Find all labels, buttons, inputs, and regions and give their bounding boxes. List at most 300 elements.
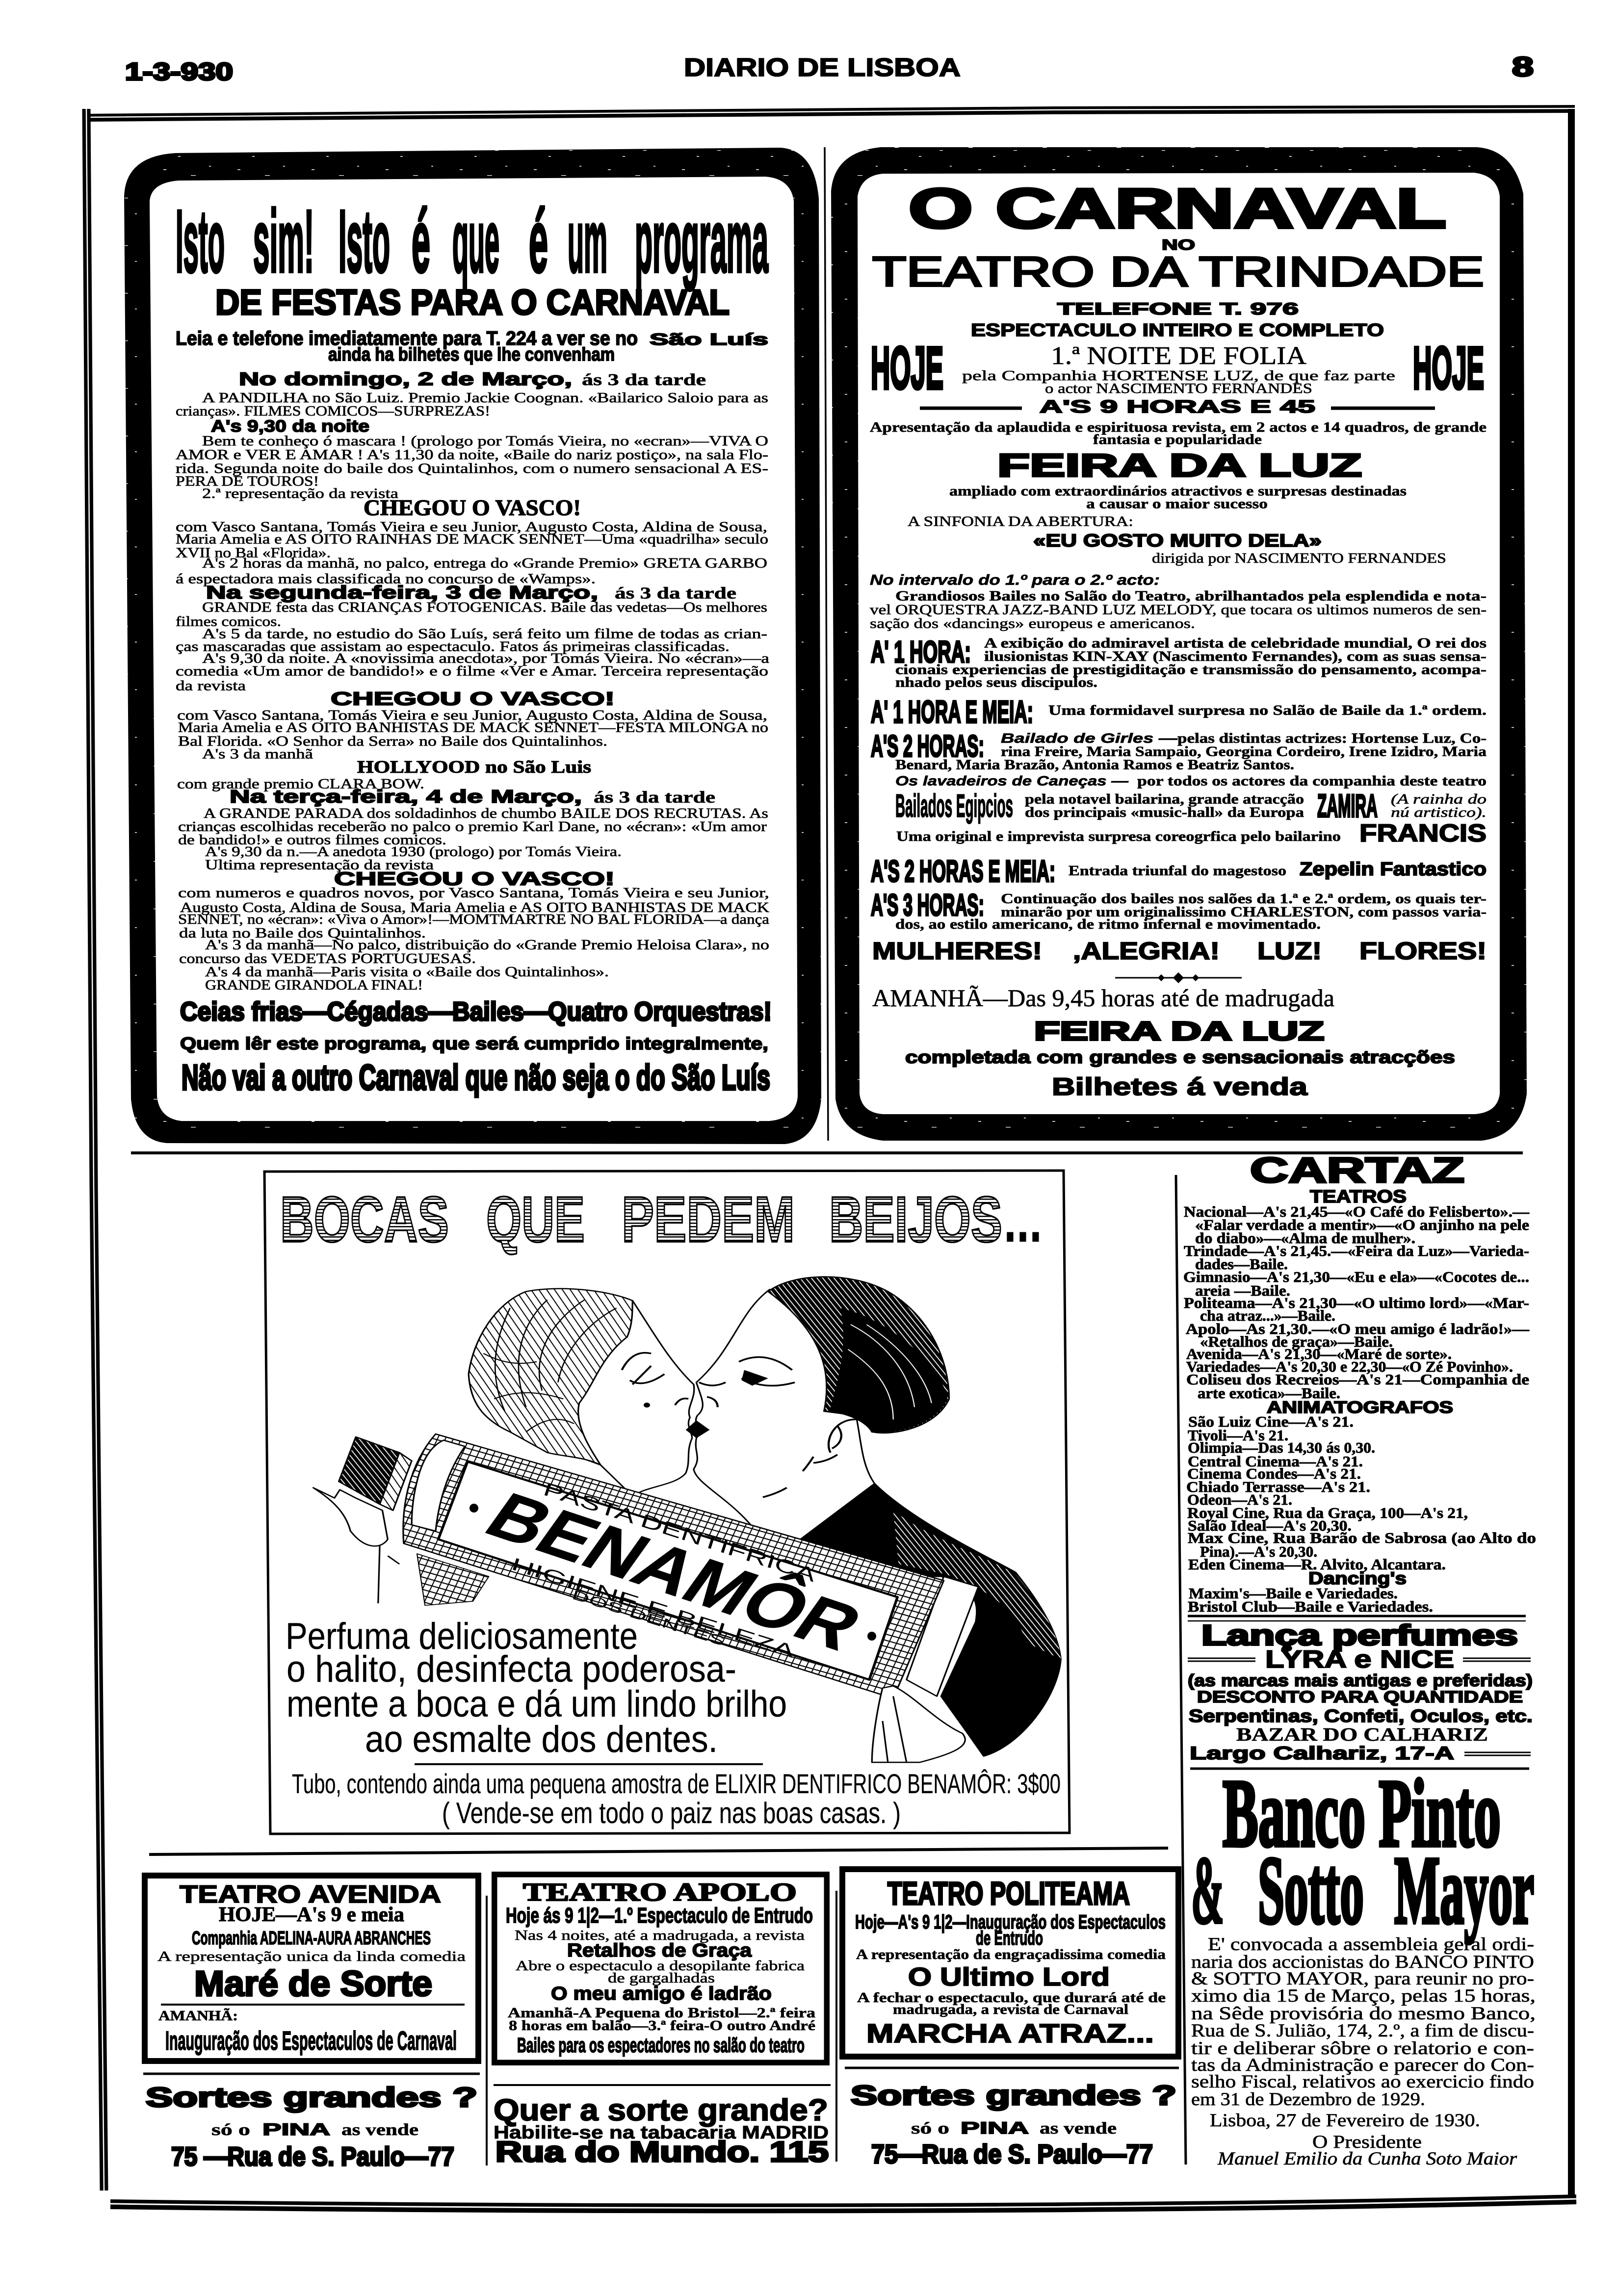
schedule: three o'clock (871, 888, 1487, 932)
lottery ad: Rua do Mundo: Quer a sorte grande? (494, 2093, 828, 2127)
box text: A representação da engraçadissima comedia (856, 1947, 1166, 1962)
ad copy and address: (as marcas mais antigas e preferidas) (1188, 1671, 1533, 1690)
box text: Amanhã-A Pequena do Bristol—2.ª feira (508, 2005, 816, 2021)
tube label text: HIGIENE E BELEZA (509, 1554, 797, 1662)
box text: TEATRO AVENIDA (180, 1880, 441, 1908)
Monday programme: CHEGOU O VASCO! (331, 689, 615, 709)
woman's face details (622, 1353, 688, 1405)
cinema listings: Tivoli—A's 21. (1188, 1427, 1288, 1444)
schedule: one o'clock (871, 635, 1487, 690)
schedule: half past one: A' 1 HORA E MEIA: (871, 694, 1033, 730)
headline: Isto (339, 192, 390, 291)
Sunday programme: crianças». FILMES COMICOS—SURPREZAS! (176, 403, 490, 419)
Monday programme: ças mascaradas que assistam ao espectaculo. Fatos ás primeiras classificadas. (176, 639, 730, 654)
box text: Hoje—A's 9 1|2—Inauguração dos Espectaculos (855, 1911, 1166, 1933)
ad price and availability: ( Vende-se em todo o paiz nas boas casas. ) (442, 1797, 901, 1829)
ad headline: ... (1004, 1183, 1042, 1255)
schedule: two o'clock: pelas distintas actrizes: Hortense Luz, Co- (1177, 731, 1487, 746)
lottery ad: Rua do Mundo: Rua do Mundo. 115 (496, 2136, 829, 2168)
ad copy and address: Largo Calhariz, 17-A (1190, 1743, 1454, 1763)
man's suit (792, 1484, 1061, 1756)
headline: ESPECTACULO INTEIRO E COMPLETO (971, 320, 1384, 340)
attractions banner: LUZ! (1257, 938, 1322, 965)
notice text: E' convocada a assembleia geral ordi- (1208, 1934, 1534, 1955)
Tuesday programme (178, 786, 769, 993)
schedule: three o'clock: minarão por um originalissimo CHARLESTON, com passos varia- (1001, 904, 1487, 920)
panel frame (831, 147, 1527, 1141)
Monday programme: comedia «Um amor de bandido!» e o filme «Ver e Amar. Terceira representação (176, 663, 768, 679)
Sunday programme: Bem te conheço ó mascara ! (prologo por Tomás Vieira, no «ecran»—VIVA O (202, 433, 768, 449)
Sunday programme: CHEGOU O VASCO! (364, 496, 581, 520)
telephone call to action: Leia e telefone imediatamente para T. 224 a ver se no (176, 328, 638, 349)
cinema listings: Pina).—A's 20,30. (1200, 1543, 1317, 1560)
headline: sim! (253, 192, 314, 291)
Feira da Luz description: «EU GOSTO MUITO DELA» (1033, 530, 1322, 550)
headline: Isto (176, 192, 225, 291)
bank name: Sotto (1258, 1836, 1364, 1944)
date: 1-3-930 (125, 58, 233, 85)
Tuesday programme: A's 4 da manhã—Paris visita o «Baile dos Quintalinhos». (205, 964, 609, 980)
Monday programme: ás 3 da tarde (615, 584, 736, 602)
cinema listings: Max Cine, Rua Barão de Sabrosa (ao Alto do (1188, 1529, 1536, 1546)
notice text: na Sêde provisória do mesmo Banco, (1191, 2004, 1536, 2024)
panel: Benamor toothpaste advertisement (264, 1171, 1069, 1834)
theatre listings: Trindade—A's 21,45.—«Feira da Luz»—Varieda- (1184, 1242, 1529, 1259)
headline: NO (1162, 237, 1195, 253)
headline (176, 192, 768, 291)
Tuesday programme: ás 3 da tarde (594, 788, 715, 807)
ad headline (280, 1183, 1042, 1255)
box text: O meu amigo é ladrão (551, 1983, 772, 2004)
Sunday programme: 2.ª representação da revista (202, 486, 398, 501)
cinema listings: Central Cinema—A's 21. (1188, 1453, 1363, 1470)
notice text: selho Fiscal, relativos ao exercicio findo (1191, 2072, 1534, 2092)
Feira da Luz description (870, 419, 1487, 566)
panel: Teatro Avenida (145, 1876, 478, 2061)
schedule: three o'clock: A'S 3 HORAS: (871, 888, 984, 922)
cinema listings: Eden Cinema—R. Alvito, Alcantara. (1188, 1556, 1446, 1573)
tomorrow notice: Bilhetes á venda (1052, 1073, 1308, 1100)
schedule: one o'clock: cionais experiencias de prestigiditação e transmissão do pensamento, acompa- (895, 662, 1487, 678)
theatre listings: cha atraz...»—Baile. (1200, 1307, 1335, 1324)
today banner: HOJE (871, 335, 943, 401)
interval dances (870, 572, 1487, 631)
tomorrow notice: completada com grandes e sensacionais atracções (905, 1047, 1455, 1067)
ad headline: BOCAS (280, 1183, 449, 1255)
ad copy and address: BAZAR DO CALHARIZ (1236, 1724, 1488, 1745)
toothpaste tube (403, 1434, 944, 1698)
Monday programme: da revista (176, 678, 246, 694)
schedule: two o'clock: nú artistico). (1391, 805, 1487, 820)
interval dances: No intervalo do 1.º para o 2.º acto: (870, 572, 1160, 588)
box text: Bailes para os espectadores no salão do teatro (517, 2034, 805, 2057)
notice text: naria dos accionistas do BANCO PINTO (1191, 1952, 1534, 1972)
theatre listings: dades—Baile. (1195, 1255, 1288, 1273)
schedule: half past one: Uma formidavel surpresa no Salão de Baile da 1.ª ordem. (1048, 703, 1487, 718)
attractions banner: ,ALEGRIA! (1073, 938, 1220, 965)
cinemas heading: ANIMATOGRAFOS (1267, 1398, 1453, 1417)
cinema listings (1186, 1413, 1536, 1573)
headline: que (452, 192, 499, 291)
ad price and availability: Tubo, contendo ainda uma pequena amostra de ELIXIR DENTIFRICO BENAMÔR: 3$00 (292, 1768, 1061, 1799)
Sunday programme (176, 369, 768, 587)
theatre listings: Coliseu dos Recreios—A's 21—Companhia de (1186, 1371, 1529, 1388)
box text: Companhia ADELINA-AURA ABRANCHES (192, 1928, 431, 1949)
Monday programme: HOLLYOOD no São Luis (357, 757, 591, 777)
Tuesday programme: A's 3 da manhã—No palco, distribuição do «Grande Premio Heloisa Clara», no (205, 937, 769, 953)
box text (506, 1879, 816, 2057)
theatre listings: do diabo»—«Alma de mulher». (1195, 1229, 1415, 1247)
Tuesday programme: Augusto Costa, Aldina de Sousa, Maria Amelia e AS OITO BANHISTAS DE MACK (180, 900, 769, 915)
schedule: one o'clock: nhado pelos seus discipulos. (895, 675, 1097, 690)
box text: Abre o espectaculo a desopilante fabrica (516, 1958, 805, 1974)
Tuesday programme: crianças escolhidas receberão no palco o premio Karl Dane, no «écran»: «Um amor (178, 819, 767, 835)
lottery ad: Pina right (845, 2068, 1179, 2169)
panel: Sao Luis carnival programme (124, 148, 821, 1144)
headline: é (529, 192, 548, 291)
Sunday programme: AMOR e VER E AMAR ! A's 11,30 da noite, «Baile do nariz postiço», na sala Flo- (176, 447, 768, 463)
schedule: half past two: Entrada triunfal do magestoso (1069, 863, 1286, 879)
theatre listings: areia —Baile. (1195, 1282, 1290, 1299)
closing slogans (180, 997, 772, 1097)
Sunday programme: A's 2 horas da manhã, no palco, entrega do «Grande Premio» GRETA GARBO (202, 555, 767, 571)
today banner (871, 335, 1484, 417)
Sunday programme: XVII no Bal «Florida». (176, 545, 331, 561)
box text: Maré de Sorte (194, 1964, 432, 2004)
cinema listings: Salão Ideal—A's 20,30. (1188, 1517, 1352, 1534)
theatre listings: Politeama—A's 21,30—«O ultimo lord»—«Mar- (1184, 1294, 1529, 1311)
telephone call to action: São Luís (650, 330, 768, 348)
Tuesday programme: concurso das VEDETAS PORTUGUESAS. (179, 951, 476, 966)
schedule: two o'clock: FRANCIS (1359, 819, 1487, 847)
panel: Banco Pinto & Sotto Mayor notice (1191, 1759, 1536, 2169)
box text (157, 1880, 466, 2056)
schedule: three o'clock: Continuação dos bailes nos salões da 1.ª e 2.ª ordem, os quais ter- (1001, 891, 1487, 907)
panel: Teatro da Trindade carnival (831, 147, 1527, 1141)
masthead (125, 51, 1534, 85)
Monday programme: com Vasco Santana, Tomás Vieira e seu Junior, Augusto Costa, Aldina de Sousa, (177, 707, 767, 723)
box frame (145, 1876, 478, 2061)
theatre listings: Gimnasio—A's 21,30—«Eu e ela»—«Cocotes de... (1183, 1268, 1529, 1285)
dancing heading: Dancing's (1308, 1569, 1407, 1588)
lottery ad: Rua do Mundo: Habilite-se na tabacaria MADRID (494, 2122, 829, 2142)
man's ear and face details (699, 1357, 859, 1497)
box frame (495, 1875, 827, 2062)
cinema listings: Odeon—A's 21. (1187, 1491, 1292, 1508)
schedule: two o'clock: Bailado de Girles — (1001, 731, 1178, 746)
schedule: half past two: A'S 2 HORAS E MEIA: (871, 855, 1055, 888)
panel: Teatro da Trindade carnival: HOJE (1413, 335, 1484, 401)
headline (872, 178, 1484, 340)
interval dances: sação dos «dancings» europeus e americanos. (870, 616, 1195, 631)
attractions banner (872, 938, 1487, 965)
panel: Lanca perfumes advertisement: LYRA e NICE (1265, 1645, 1454, 1673)
box text: HOJE—A's 9 e meia (219, 1904, 404, 1926)
box text: O Ultimo Lord (908, 1963, 1110, 1991)
schedule: two o'clock: dos principais «music-hall» da Europa (1025, 805, 1304, 820)
lottery ad: Pina right: PINA (961, 2119, 1029, 2138)
tube label text: DOS DENTES (570, 1587, 727, 1649)
closing slogans: Quem lêr este programa, que será cumprido integralmente, (180, 1034, 768, 1053)
schedule: half past two: Zepelin Fantastico (1300, 859, 1487, 880)
Tuesday programme: com numeros e quadros novos, por Vasco Santana, Tomás Vieira e seu Junior, (178, 885, 769, 901)
Sunday programme: PERA DE TOUROS! (176, 473, 319, 489)
notice text: Rua de S. Julião, 174, 2.º, a fim de discu- (1191, 2021, 1534, 2041)
box text: Hoje ás 9 1|2—1.º Espectaculo de Entrudo (506, 1904, 813, 1928)
ad headline: QUE (486, 1183, 585, 1255)
ad copy: o halito, desinfecta poderosa- (287, 1648, 736, 1690)
listings title: CARTAZ (1250, 1151, 1464, 1190)
Tuesday programme: A GRANDE PARADA dos soldadinhos de chumbo BAILE DOS RECRUTAS. As (204, 806, 768, 821)
Monday programme: Bal Florida. «O Senhor da Serra» no Baile dos Quintalinhos. (178, 733, 607, 749)
schedule: one o'clock: A exibição do admiravel artista de celebridade mundial, O rei dos (984, 635, 1487, 651)
schedule: two o'clock: A'S 2 HORAS: (871, 730, 984, 763)
schedule: two o'clock: pela notavel bailarina, grande atracção (1025, 791, 1304, 807)
product name: Lança perfumes (1201, 1619, 1518, 1651)
schedule: two o'clock: (A rainha do (1391, 791, 1487, 807)
dancing listings: Bristol Club—Baile e Variedades. (1188, 1598, 1433, 1615)
panel: Cartaz theatre listings (1183, 1151, 1536, 1615)
woman's hair (469, 1289, 632, 1465)
panel: Lanca perfumes advertisement (1188, 1616, 1533, 1769)
box text: TEATRO POLITEAMA (887, 1875, 1130, 1911)
schedule: one o'clock: A' 1 HORA: (871, 635, 971, 669)
headline: TELEFONE T. 976 (1057, 300, 1299, 318)
schedule: two o'clock: Uma original e imprevista surpresa coreogrfica pelo bailarino (896, 829, 1341, 844)
Monday programme (176, 582, 769, 792)
Tuesday programme: A's 9,30 da n.—A anedota 1930 (prologo) por Tomás Vieira. (205, 844, 622, 860)
schedule: two o'clock: por todos os actores da companhia deste teatro (1137, 773, 1487, 789)
Feira da Luz description: A SINFONIA DA ABERTURA: (908, 514, 1133, 529)
panel: Teatro Apolo (495, 1875, 827, 2062)
schedule: two o'clock: ZAMIRA (1317, 787, 1378, 824)
box frame (842, 1869, 1178, 2057)
panel frame (124, 148, 821, 1144)
theatres heading: TEATROS (1310, 1186, 1407, 1206)
cinema listings: Royal Cine, Rua da Graça, 100—A's 21, (1187, 1504, 1468, 1521)
ad copy: ao esmalte dos dentes. (365, 1719, 718, 1760)
Tuesday programme: Ultima representação da revista (205, 857, 434, 873)
notice text: tir e deliberar sôbre o relatorio e con- (1191, 2038, 1534, 2059)
Monday programme: A's 3 da manhã (202, 746, 313, 762)
Sunday programme: Maria Amelia e AS OITO RAINHAS DE MACK SENNET—Uma «quadrilha» seculo (176, 531, 768, 547)
lottery ad: Pina right: Sortes grandes ? (851, 2080, 1176, 2111)
date and signature: O Presidente (1312, 2132, 1422, 2152)
theatre listings: Avenida—A's 21,30—«Maré de sorte». (1186, 1345, 1452, 1362)
schedule: one o'clock: ilusionistas KIN-XAY (Nascimento Fernandes), com as suas sensa- (984, 649, 1487, 664)
ad copy (286, 1616, 787, 1764)
attractions banner: FLORES! (1359, 938, 1487, 965)
tube label text: BENAMÔR (472, 1479, 876, 1663)
illustration: kissing couple with toothpaste tube (313, 1277, 1061, 1762)
theatre listings: Variedades—A's 20,30 e 22,30—«O Zé Povinho». (1186, 1358, 1513, 1375)
Feira da Luz description: fantasia e popularidade (1093, 432, 1262, 447)
notice text: ximo dia 15 de Março, pelas 15 horas, (1191, 1986, 1536, 2006)
lottery ad: Rua do Mundo (494, 2085, 831, 2168)
lottery ad: Pina left: Sortes grandes ? (146, 2082, 477, 2113)
today banner: 1.ª NOITE DE FOLIA (1051, 342, 1306, 370)
shirt cuff (907, 1576, 978, 1696)
headline: TEATRO DA TRINDADE (872, 249, 1484, 295)
ad copy: mente a boca e dá um lindo brilho (287, 1683, 787, 1725)
man's eye (742, 1370, 768, 1385)
box text: Nas 4 noites, até a madrugada, a revista (515, 1928, 805, 1943)
headline: O CARNAVAL (909, 178, 1446, 240)
lottery ad: Pina left: PINA (262, 2120, 330, 2139)
cinema listings: Chiado Terrasse—A's 21. (1186, 1478, 1370, 1495)
box text: TEATRO APOLO (523, 1879, 797, 1906)
Feira da Luz description: FEIRA DA LUZ (997, 447, 1362, 483)
notice text: em 31 de Dezembro de 1929. (1191, 2089, 1425, 2110)
ad headline: BEIJOS (829, 1183, 1002, 1255)
schedule: half past one (871, 694, 1487, 730)
Tuesday programme: SENNET, no «écran»: «Viva o Amor»!—MOMTMARTRE NO BAL FLORIDA—a dança (178, 912, 769, 927)
theatre listings: «Falar verdade a mentir»—«O anjinho na pele (1195, 1216, 1529, 1233)
headline: é (412, 192, 430, 291)
notice text: tas da Administração e parecer do Con- (1191, 2055, 1534, 2075)
interval dances: Grandiosos Bailes no Salão do Teatro, abrilhantados pela esplendida e nota- (895, 588, 1487, 604)
box text (855, 1875, 1166, 2048)
schedule: two o'clock: Os lavadeiros de Caneças — (895, 773, 1129, 788)
box text: de Entrudo (976, 1928, 1043, 1949)
theatre listings: «Retalhos de graça»—Baile. (1200, 1333, 1393, 1350)
ad copy and address (1188, 1671, 1533, 1769)
panel: Teatro Politeama (842, 1869, 1178, 2057)
lottery ad: Pina right: 75—Rua de S. Paulo—77 (871, 2139, 1153, 2169)
box text: A fechar o espectaculo, que durará até de (857, 1990, 1166, 2006)
subheadline: DE FESTAS PARA O CARNAVAL (215, 283, 730, 322)
cinema listings: São Luiz Cine—A's 21. (1188, 1413, 1354, 1430)
attractions banner: MULHERES! (872, 938, 1042, 965)
closing slogans: Não vai a outro Carnaval que não seja o do São Luís (182, 1058, 770, 1097)
box text: Retalhos de Graça (567, 1940, 752, 1961)
ad copy and address: DESCONTO PARA QUANTIDADE (1197, 1688, 1523, 1706)
box text: Inauguração dos Espectaculos de Carnaval (165, 2026, 457, 2056)
date and signature: Manuel Emilio da Cunha Soto Maior (1217, 2149, 1517, 2169)
lottery ad: Pina left: só o (211, 2121, 250, 2139)
schedule: three o'clock: dos, ao estilo americano, de ritmo infernal e movimentado. (895, 916, 1321, 932)
tube cap (339, 1437, 399, 1504)
Feira da Luz description: a causar o maior sucesso (1086, 496, 1268, 512)
box text: de gargalhadas (608, 1970, 715, 1986)
today banner: A'S 9 HORAS E 45 (1040, 396, 1315, 417)
tomorrow notice: FEIRA DA LUZ (1034, 1017, 1324, 1046)
bank name: & (1191, 1836, 1224, 1944)
newspaper name: DIARIO DE LISBOA (684, 53, 961, 82)
tomorrow notice: AMANHÃ—Das 9,45 horas até de madrugada (872, 984, 1334, 1012)
date and signature (1210, 2111, 1517, 2169)
closing slogans: Ceias frias—Cégadas—Bailes—Quatro Orquestras! (180, 997, 772, 1026)
today banner: pela Companhia HORTENSE LUZ, de que faz parte (962, 368, 1395, 384)
holding left hand and lace cuff (313, 1487, 388, 1546)
Feira da Luz description: ampliado com extraordinários atractivos e surpresas destinadas (949, 483, 1407, 499)
woman's head (548, 1301, 694, 1496)
jacket shoulder hatching (893, 1511, 1061, 1659)
Tuesday programme: Na terça-feira, 4 de Março, (230, 786, 582, 807)
Sunday programme: rida. Segunda noite do baile dos Quintalinhos, com o numero sensacional A ES- (176, 461, 768, 476)
Feira da Luz description: Apresentação da aplaudida e espirituosa revista, em 2 actos e 14 quadros, de grande (870, 419, 1487, 435)
Tuesday programme: de bandido!» e outros filmes comicos. (178, 832, 446, 848)
lottery ad: Pina left: as vende (341, 2121, 418, 2139)
ad copy: Perfuma deliciosamente (286, 1616, 638, 1657)
theatre listings: Nacional—A's 21,45—«O Café do Felisberto».— (1184, 1203, 1530, 1220)
Tuesday programme: GRANDE GIRANDOLA FINAL! (205, 977, 423, 993)
notice text (1191, 1934, 1536, 2110)
tube label text: PASTA DENTIFRICA (541, 1479, 819, 1586)
lottery ad: Pina left: 75 —Rua de S. Paulo—77 (171, 2142, 454, 2171)
box text: 8 horas em balão—3.ª feira-O outro André (509, 2018, 815, 2034)
ad copy and address: Serpentinas, Confeti, Oculos, etc. (1189, 1706, 1533, 1726)
theatre listings: arte exotica»—Baile. (1198, 1384, 1340, 1402)
ornament rule (1115, 973, 1242, 982)
schedule: half past two (871, 855, 1487, 888)
Tuesday programme: da luta no Baile dos Quintalinhos. (179, 925, 426, 941)
schedule: two o'clock: rina Freire, Maria Sampaio, Georgina Cordeiro, Irene Izidro, Maria (1001, 744, 1487, 759)
dancing listings (1188, 1585, 1433, 1615)
lottery ad: Pina right: só o (911, 2119, 949, 2138)
schedule: two o'clock (871, 730, 1487, 847)
box text: madrugada, a revista de Carnaval (893, 2002, 1128, 2017)
Monday programme: Maria Amelia e AS OITO BANHISTAS DE MACK SENNET—FESTA MILONGA no (178, 720, 768, 735)
theatre listings (1183, 1203, 1530, 1402)
page number: 8 (1512, 51, 1534, 82)
cinema listings: Olimpia—Das 14,30 ás 0,30. (1188, 1439, 1375, 1456)
Monday programme: A's 9,30 da noite. A «novissima anecdota», por Tomás Vieira. No «écran»—a (202, 651, 769, 666)
lottery ad: Pina right: as vende (1040, 2119, 1117, 2138)
box text: MARCHA ATRAZ... (866, 2019, 1154, 2048)
schedule: two o'clock: Benard, Maria Brazão, Antonia Ramos e Beatriz Santos. (895, 757, 1294, 773)
headline: um (568, 192, 607, 291)
telephone call to action (176, 328, 768, 365)
Monday programme: com grande premio CLARA BOW. (177, 776, 424, 792)
lottery ad: Pina left (143, 2074, 480, 2171)
cinema listings: Cinema Condes—A's 21. (1187, 1465, 1361, 1482)
interval dances: vel ORQUESTRA JAZZ-BAND LUZ MELODY, que tocara os ultimos numeros de sen- (870, 602, 1487, 618)
man's head (694, 1289, 875, 1545)
Monday programme: GRANDE festa das CRIANÇAS FOTOGENICAS. Baile das vedetas—Os melhores (202, 600, 767, 615)
theatre listings: Apolo—As 21,30.—«O meu amigo é ladrão!»— (1186, 1320, 1530, 1337)
tomorrow notice (872, 984, 1455, 1100)
bank name (1191, 1759, 1534, 1944)
Feira da Luz description: dirigida por NASCIMENTO FERNANDES (1152, 550, 1446, 566)
Sunday programme: á espectadora mais classificada no concurso de «Wamps». (176, 571, 596, 587)
man's hair (768, 1277, 949, 1433)
date and signature: Lisboa, 27 de Fevereiro de 1930. (1210, 2111, 1480, 2131)
ad frame (264, 1171, 1069, 1834)
Sunday programme: A PANDILHA no São Luiz. Premio Jackie Coognan. «Bailarico Saloio para as (202, 390, 768, 406)
Sunday programme: A's 9,30 da noite (211, 417, 369, 436)
notice text: & SOTTO MAYOR, para reunir no pro- (1191, 1969, 1534, 1989)
Sunday programme: ás 3 da tarde (582, 371, 706, 389)
schedule: two o'clock: Bailados Egipcios (895, 787, 1013, 824)
box text: A representação unica da linda comedia (157, 1949, 466, 1964)
today banner: o actor NASCIMENTO FERNANDES (1045, 381, 1312, 396)
tube label (438, 1461, 897, 1680)
Sunday programme: com Vasco Santana, Tomás Vieira e seu Junior, Augusto Costa, Aldina de Sousa, (176, 519, 767, 535)
Monday programme: A's 5 da tarde, no estudio do São Luís, será feito um filme de todas as crian- (202, 626, 767, 642)
holding right hand (872, 1686, 965, 1762)
Sunday programme: No domingo, 2 de Março, (239, 369, 572, 389)
Monday programme: filmes comicos. (176, 614, 281, 629)
ad headline: PEDEM (622, 1183, 795, 1255)
text: programa (635, 192, 768, 291)
telephone call to action: ainda ha bilhetes que lhe convenham (328, 344, 615, 365)
dancing listings: Maxim's—Baile e Variedades. (1189, 1585, 1398, 1602)
Monday programme: Na segunda-feira, 3 de Março, (206, 582, 598, 602)
ad price and availability (292, 1768, 1061, 1829)
box text: AMANHÃ: (158, 2008, 238, 2024)
Tuesday programme: CHEGOU O VASCO! (334, 869, 615, 889)
